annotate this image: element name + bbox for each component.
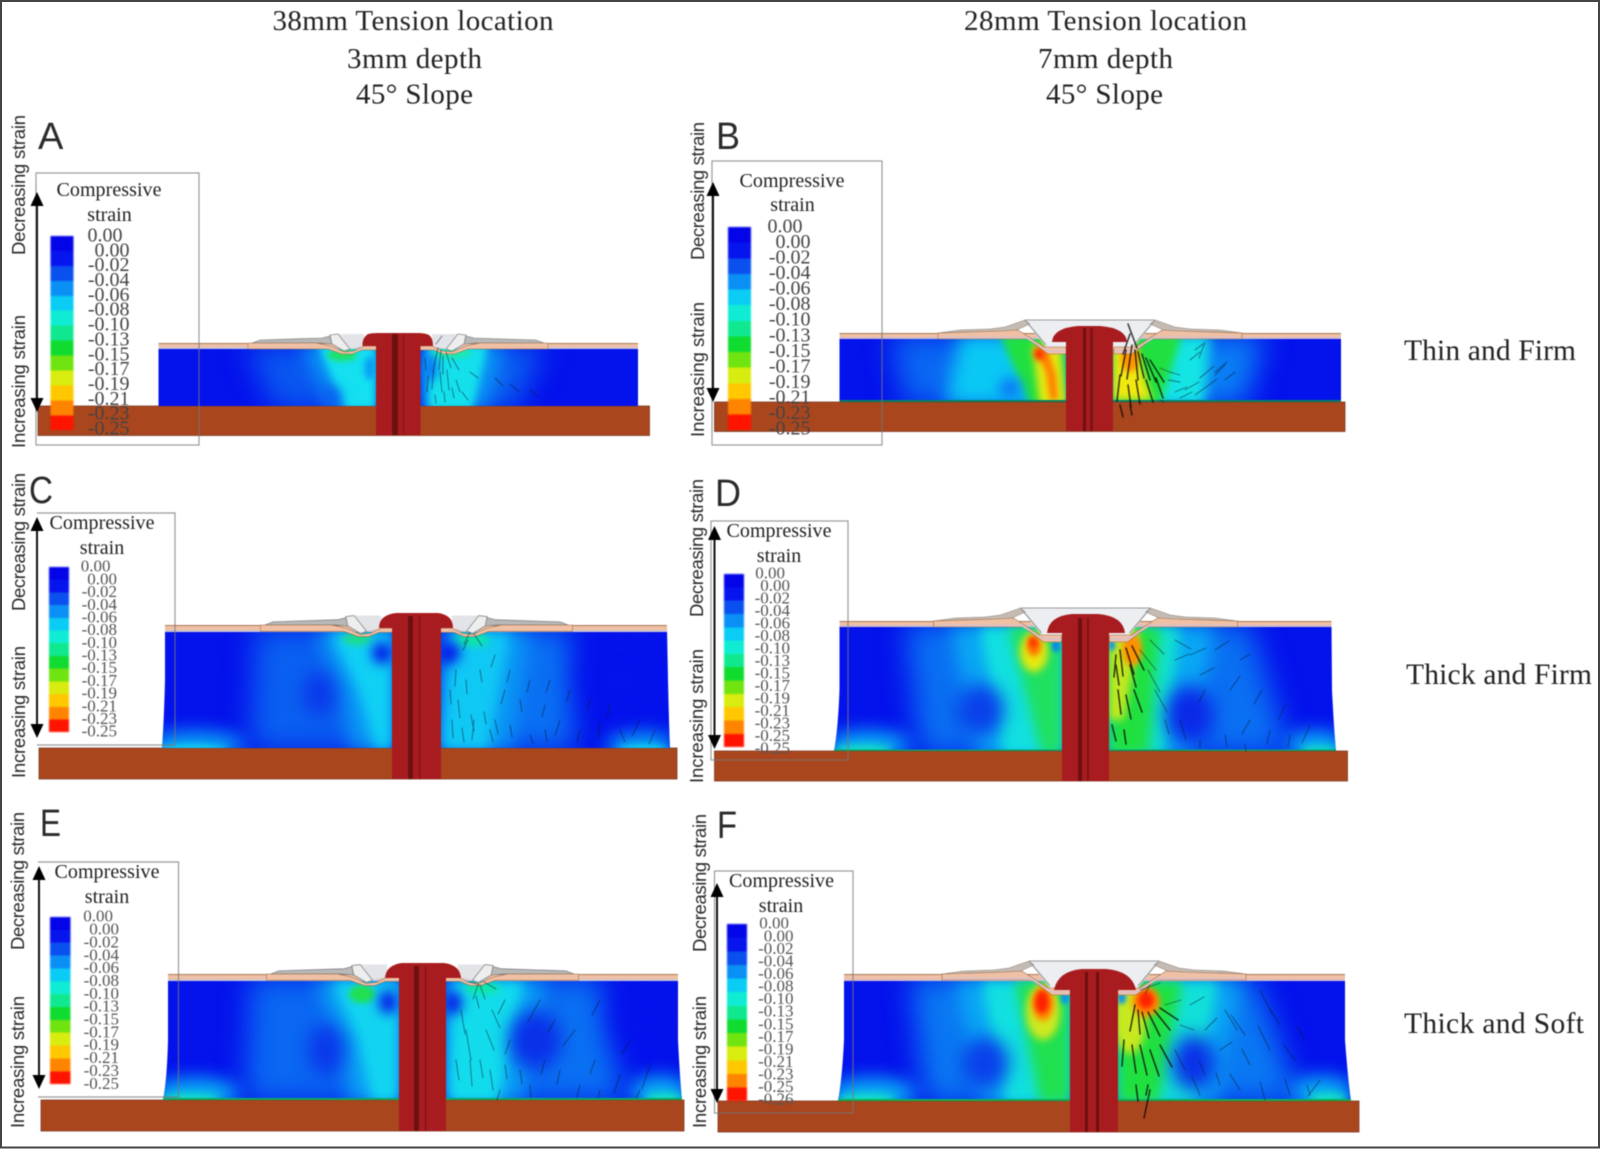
legend C bbox=[49, 512, 155, 741]
legend C: 0.00 bbox=[81, 557, 110, 576]
legend B: -0.19 bbox=[769, 371, 810, 393]
legend F: -0.19 bbox=[758, 1039, 794, 1058]
legend A: -0.02 bbox=[88, 254, 130, 276]
base plate C bbox=[39, 748, 677, 779]
skin layer E bbox=[168, 974, 678, 981]
legend D: -0.10 bbox=[755, 639, 790, 658]
column heading: 38mm tension location bbox=[272, 5, 554, 110]
base plate B bbox=[714, 402, 1345, 432]
legend E: -0.08 bbox=[84, 971, 119, 990]
strain vectors A bbox=[425, 336, 538, 403]
row label: thick and firm: Thick and Firm bbox=[1406, 659, 1592, 691]
axis labels F bbox=[689, 814, 710, 1128]
panel letter C: C bbox=[29, 470, 53, 512]
strain field F bbox=[837, 980, 1352, 1102]
legend D: -0.06 bbox=[755, 614, 790, 633]
legend A: -0.15 bbox=[88, 343, 130, 365]
legend C: -0.06 bbox=[82, 608, 117, 626]
axis labels C: Increasing strain bbox=[8, 646, 29, 778]
legend F: -0.25 bbox=[758, 1077, 794, 1096]
legend E: -0.06 bbox=[84, 958, 119, 977]
legend B: -0.13 bbox=[769, 324, 810, 346]
sensor cap D bbox=[934, 608, 1238, 642]
axis labels A: Decreasing strain bbox=[8, 115, 29, 255]
legend A: Compressive bbox=[56, 179, 162, 201]
legend E: -0.02 bbox=[84, 932, 119, 951]
legend D: -0.13 bbox=[755, 651, 790, 670]
legend F: -0.10 bbox=[758, 989, 794, 1008]
legend E: -0.19 bbox=[84, 1035, 119, 1054]
axis labels F: Increasing strain bbox=[689, 996, 710, 1128]
strain field B bbox=[839, 335, 1342, 405]
legend C: -0.08 bbox=[82, 620, 117, 639]
legend A: -0.19 bbox=[88, 373, 130, 395]
column heading: 28mm tension location bbox=[964, 5, 1248, 110]
panel letter B: B bbox=[716, 116, 740, 158]
legend B: -0.21 bbox=[769, 386, 810, 408]
panel C: thick and firm, 38mm bbox=[8, 470, 677, 779]
legend D: -0.04 bbox=[755, 601, 790, 620]
legend D: -0.25 bbox=[755, 726, 790, 745]
strain arrow F bbox=[710, 883, 724, 1103]
strain arrow A bbox=[30, 192, 44, 412]
legend A: -0.10 bbox=[88, 314, 130, 336]
axis labels E bbox=[7, 812, 28, 1128]
row label: thick and soft: Thick and Soft bbox=[1404, 1008, 1585, 1040]
strain arrow D bbox=[708, 526, 721, 749]
bolt C bbox=[379, 613, 453, 779]
legend B: Compressive bbox=[740, 170, 845, 192]
legend box A bbox=[36, 173, 199, 445]
legend E: 0.00 bbox=[89, 920, 119, 939]
column heading: 38mm tension location: 45° Slope bbox=[356, 78, 473, 110]
base plate F bbox=[718, 1101, 1359, 1132]
legend B: 0.00 bbox=[768, 216, 802, 238]
skin layer D bbox=[840, 621, 1332, 627]
skin layer F bbox=[844, 974, 1345, 981]
legend A: -0.17 bbox=[88, 358, 130, 380]
sensor cap C bbox=[260, 616, 572, 637]
row label: thin and firm: Thin and Firm bbox=[1404, 335, 1576, 367]
axis labels C: Decreasing strain bbox=[8, 473, 29, 611]
strain vectors E bbox=[456, 982, 650, 1100]
legend A: 0.00 bbox=[88, 224, 122, 246]
legend A bbox=[50, 179, 162, 440]
legend E: -0.25 bbox=[84, 1074, 119, 1093]
axis labels B: Increasing strain bbox=[687, 302, 708, 437]
bolt B bbox=[1052, 326, 1127, 431]
legend F: -0.02 bbox=[758, 939, 794, 958]
panel E: thick and soft, 38mm bbox=[7, 803, 690, 1131]
column heading: 28mm tension location: 7mm depth bbox=[1038, 43, 1174, 75]
legend D: -0.23 bbox=[755, 714, 790, 733]
legend D: strain bbox=[757, 545, 801, 567]
legend C: -0.10 bbox=[82, 633, 117, 652]
bolt E bbox=[385, 963, 461, 1131]
legend B: strain bbox=[770, 194, 815, 216]
legend F: -0.04 bbox=[758, 951, 794, 970]
legend D: -0.02 bbox=[755, 589, 790, 608]
legend B: -0.08 bbox=[769, 293, 810, 315]
strain vectors F bbox=[1122, 1005, 1178, 1118]
legend E: -0.17 bbox=[84, 1022, 119, 1041]
legend C: strain bbox=[80, 537, 124, 559]
legend A: strain bbox=[87, 204, 132, 226]
legend B: -0.23 bbox=[769, 402, 810, 424]
strain arrow E bbox=[32, 866, 46, 1089]
legend B: -0.06 bbox=[769, 278, 810, 300]
strain arrow B bbox=[706, 182, 720, 402]
legend C: -0.23 bbox=[82, 709, 117, 728]
legend F: 0.00 bbox=[764, 926, 794, 945]
base plate E bbox=[41, 1100, 684, 1131]
axis labels A bbox=[8, 115, 29, 448]
strain vectors B bbox=[1117, 324, 1164, 417]
base plate A bbox=[38, 406, 650, 436]
legend C: -0.13 bbox=[82, 646, 117, 664]
legend B bbox=[728, 170, 845, 440]
panel F: thick and soft, 28mm bbox=[689, 805, 1359, 1132]
legend A: -0.08 bbox=[88, 299, 130, 321]
legend box F bbox=[714, 871, 853, 1113]
skin layer A bbox=[158, 343, 638, 349]
panel letter A: A bbox=[38, 116, 64, 158]
legend D: -0.19 bbox=[755, 689, 790, 708]
legend C: 0.00 bbox=[87, 569, 117, 588]
legend A: -0.25 bbox=[88, 418, 130, 440]
sensor cap B bbox=[938, 320, 1242, 354]
strain field D bbox=[833, 626, 1337, 752]
legend A: -0.23 bbox=[88, 403, 130, 425]
legend C: -0.17 bbox=[82, 671, 117, 690]
legend D: 0.00 bbox=[755, 564, 785, 583]
legend F: -0.17 bbox=[758, 1027, 794, 1046]
legend B: -0.10 bbox=[769, 309, 810, 331]
legend D: -0.15 bbox=[755, 664, 790, 683]
legend F: -0.06 bbox=[758, 964, 794, 983]
legend D: 0.00 bbox=[760, 576, 790, 595]
legend E: -0.23 bbox=[84, 1061, 119, 1080]
axis labels C bbox=[8, 473, 29, 778]
legend A: -0.04 bbox=[88, 269, 130, 291]
legend F: -0.13 bbox=[758, 1002, 794, 1021]
axis labels E: Decreasing strain bbox=[7, 812, 28, 950]
legend box D bbox=[711, 521, 848, 760]
legend E bbox=[50, 861, 160, 1093]
legend box C bbox=[37, 513, 175, 745]
legend D: -0.17 bbox=[755, 676, 790, 695]
axis labels B: Decreasing strain bbox=[687, 122, 708, 260]
legend B: -0.15 bbox=[769, 340, 810, 362]
legend C: -0.19 bbox=[82, 684, 117, 703]
legend A: -0.21 bbox=[88, 388, 130, 410]
base plate D bbox=[714, 751, 1348, 781]
axis labels F: Decreasing strain bbox=[689, 814, 710, 952]
axis labels D: Increasing strain bbox=[686, 649, 707, 783]
legend F: Compressive bbox=[729, 870, 834, 892]
axis labels D: Decreasing strain bbox=[686, 479, 707, 617]
sensor cap F bbox=[942, 961, 1246, 995]
bolt D bbox=[1047, 614, 1125, 781]
legend D: -0.21 bbox=[755, 701, 790, 720]
legend F bbox=[727, 870, 834, 1109]
legend E: -0.13 bbox=[84, 997, 119, 1016]
strain field E bbox=[162, 980, 683, 1101]
bolt A bbox=[362, 333, 433, 435]
legend E: -0.15 bbox=[84, 1010, 119, 1028]
legend F: -0.21 bbox=[758, 1052, 794, 1071]
strain vectors C bbox=[450, 632, 655, 744]
strain arrow C bbox=[30, 517, 44, 738]
legend E: Compressive bbox=[54, 861, 160, 883]
legend F: -0.08 bbox=[758, 977, 794, 996]
legend C: -0.21 bbox=[82, 696, 117, 715]
axis labels E: Increasing strain bbox=[7, 996, 28, 1128]
legend F: strain bbox=[759, 895, 803, 917]
legend E: strain bbox=[85, 886, 129, 908]
column heading: 28mm tension location: 28mm Tension location bbox=[964, 5, 1248, 37]
legend E: -0.10 bbox=[84, 984, 119, 1003]
legend B: -0.25 bbox=[769, 418, 810, 440]
legend B: -0.17 bbox=[769, 355, 810, 377]
axis labels D bbox=[686, 479, 707, 783]
sensor cap A bbox=[248, 334, 548, 354]
legend A: -0.13 bbox=[88, 328, 130, 350]
sensor cap E bbox=[266, 965, 578, 986]
legend B: 0.00 bbox=[776, 231, 810, 253]
legend E: -0.21 bbox=[84, 1048, 119, 1067]
legend A: -0.06 bbox=[88, 284, 130, 306]
panel letter E: E bbox=[40, 803, 61, 845]
column heading: 28mm tension location: 45° Slope bbox=[1046, 78, 1163, 110]
bolt F bbox=[1054, 969, 1136, 1132]
legend B: -0.04 bbox=[769, 262, 810, 284]
legend F: -0.15 bbox=[758, 1014, 794, 1033]
legend D: -0.25 bbox=[755, 739, 790, 758]
legend C: -0.04 bbox=[82, 595, 117, 614]
legend E: -0.04 bbox=[84, 945, 119, 964]
axis labels B bbox=[687, 122, 708, 437]
legend C: -0.15 bbox=[82, 658, 117, 677]
legend A: 0.00 bbox=[94, 239, 130, 261]
panel letter D: D bbox=[715, 473, 741, 515]
legend F: -0.26 bbox=[758, 1090, 794, 1109]
legend box E bbox=[38, 862, 178, 1097]
legend C: -0.25 bbox=[82, 722, 117, 741]
skin layer B bbox=[840, 333, 1341, 339]
legend D: Compressive bbox=[726, 520, 832, 542]
column heading: 38mm tension location: 3mm depth bbox=[347, 43, 482, 75]
strain field C bbox=[161, 631, 671, 749]
strain field A bbox=[158, 345, 639, 410]
panel D: thick and firm, 28mm bbox=[686, 473, 1348, 783]
axis labels A: Increasing strain bbox=[8, 315, 29, 448]
panel B: thin and firm, 28mm bbox=[687, 116, 1345, 445]
legend C: -0.02 bbox=[82, 582, 117, 601]
legend B: -0.02 bbox=[769, 247, 810, 269]
panel letter F: F bbox=[717, 805, 737, 847]
legend F: 0.00 bbox=[759, 914, 789, 933]
skin layer C bbox=[165, 625, 667, 632]
legend D: -0.08 bbox=[755, 626, 790, 645]
legend E: 0.00 bbox=[83, 907, 113, 926]
legend C: Compressive bbox=[50, 512, 155, 534]
legend F: -0.23 bbox=[758, 1064, 794, 1084]
legend D bbox=[724, 520, 832, 758]
legend box B bbox=[712, 161, 882, 445]
column heading: 38mm tension location: 38mm Tension location bbox=[272, 5, 554, 37]
panel A: thin and firm, 38mm bbox=[8, 115, 650, 448]
strain vectors D bbox=[1112, 646, 1144, 744]
